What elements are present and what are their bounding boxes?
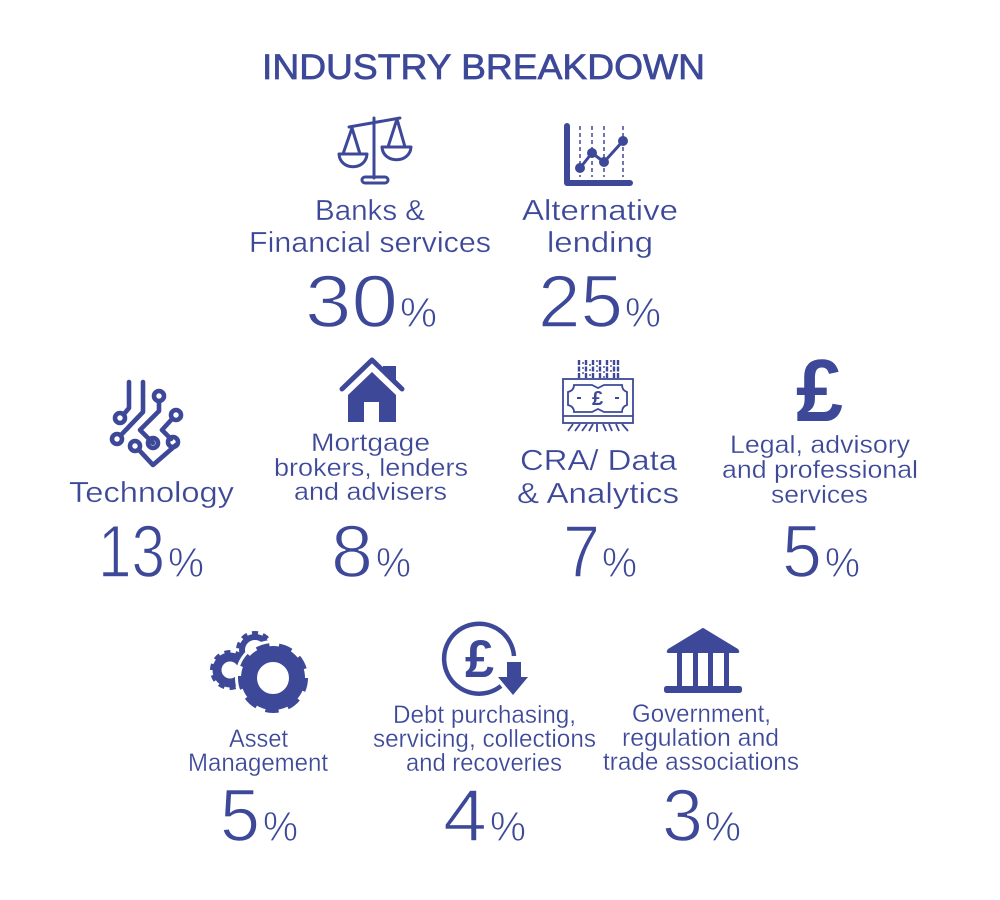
value: 25%: 25 [538,260,623,343]
panel: CRA data and analytics [517,360,679,593]
label: & Analytics [517,478,679,510]
value: 8% [331,510,411,593]
label [373,701,596,777]
label [722,431,918,509]
label: Alternative [522,195,678,227]
label: Management [188,749,328,777]
label [274,429,468,506]
panel: government and trade associations [603,628,799,857]
label: and advisers [294,478,447,506]
icon: scales [339,118,411,183]
icon: banknote chip [563,360,633,432]
label [517,445,679,510]
value: 13%: % [168,539,204,586]
panel: alternative lending [522,126,678,343]
panel: technology [69,382,235,593]
icon: pound with down arrow [444,624,528,695]
icon: bank building [664,628,742,693]
value: 7% [563,510,637,593]
label: Government, [632,700,771,728]
value: 13%: 13 [98,510,165,593]
label: Banks & [315,195,425,227]
label: and recoveries [406,749,562,777]
icon: house [342,360,402,422]
panel: asset management [188,633,328,857]
label: brokers, lenders [274,454,468,482]
icon: pound sign: £ [796,341,843,440]
label: Legal, advisory [730,431,911,459]
value: 7%: 7 [563,510,600,593]
label: Debt purchasing, [393,701,576,729]
panel: banks and financial services [249,118,491,343]
value: 30%: 30 [305,260,398,343]
label: Financial services [249,227,491,259]
value: 5%: % [825,539,860,586]
label [603,700,799,776]
value: 8%: % [376,539,411,586]
icon: pound with down arrow: £ [465,630,494,689]
label: trade associations [603,748,799,776]
value: 3% [662,774,741,857]
value: 3%: 3 [662,774,703,857]
value: 5%: 5 [220,774,260,857]
panel: mortgage brokers [274,360,468,593]
value: 5% [220,774,298,857]
label [188,725,328,777]
label: servicing, collections [373,725,596,753]
label: Mortgage [311,429,430,457]
label: regulation and [622,724,779,752]
value: 25%: % [625,289,661,336]
value: 8%: 8 [331,510,373,593]
label: lending [547,227,653,259]
panel: debt purchasing [373,624,596,857]
value: 3%: % [705,803,741,850]
label: services [771,481,868,509]
value: 5%: 5 [782,510,822,593]
label: CRA/ Data [520,445,678,477]
value: 5%: % [263,803,298,850]
icon: line chart [567,126,630,183]
icon: banknote chip: £ [592,388,603,410]
title: INDUSTRY BREAKDOWN [262,48,705,87]
label [249,195,491,259]
icon: circuit [112,382,181,465]
value: 7%: % [602,539,637,586]
value: 30% [305,260,437,343]
label: Asset [229,725,288,753]
value: 4% [443,774,526,857]
value: 30%: % [400,289,437,336]
label: Technology [69,477,235,509]
value: 5% [782,510,860,593]
panel: legal and professional services [722,341,918,593]
icon: gears [212,633,311,716]
label: and professional [722,456,918,484]
value: 4%: 4 [443,774,487,857]
label [522,195,678,259]
value: 4%: % [490,803,526,850]
value: 25% [538,260,661,343]
